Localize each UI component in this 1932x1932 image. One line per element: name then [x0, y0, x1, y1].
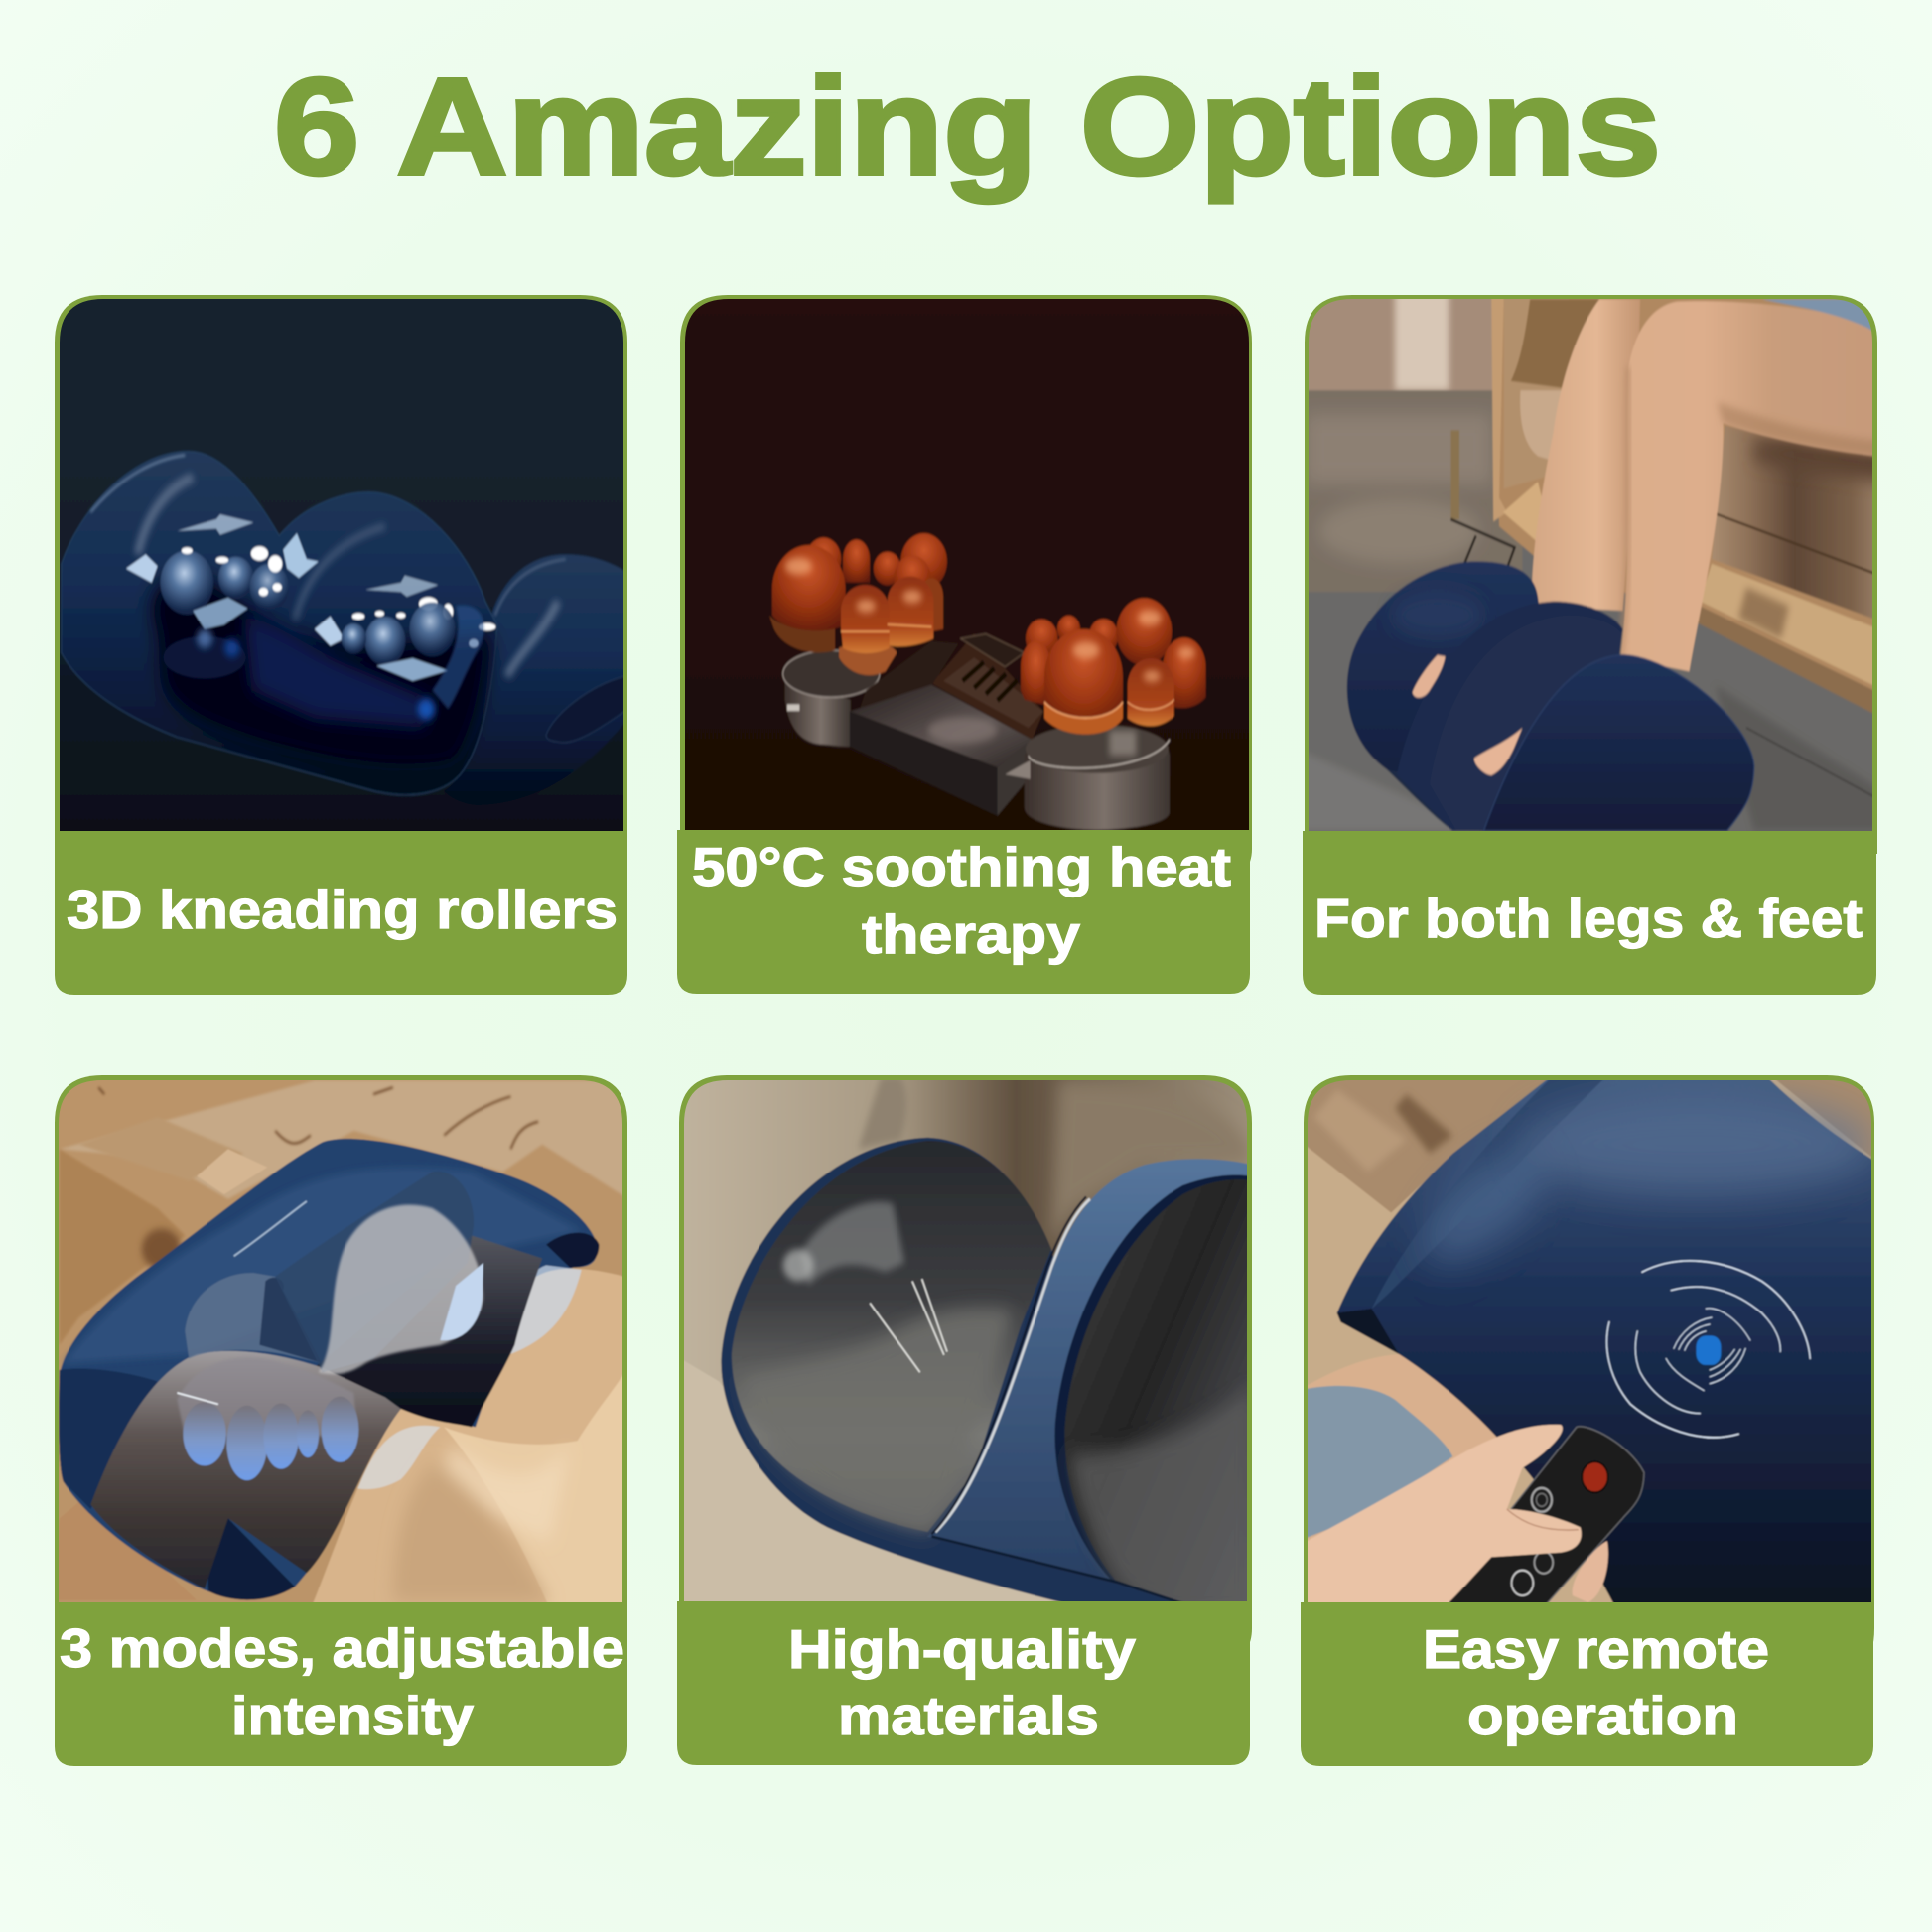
photo: remote control and massager	[1308, 1080, 1871, 1602]
photo: legs in massager on sofa	[1309, 299, 1872, 831]
caption text: 3D kneading rollers	[67, 879, 618, 940]
caption text: therapy	[862, 903, 1080, 965]
caption bar	[55, 1602, 627, 1766]
card frame	[55, 295, 627, 854]
caption bar	[55, 831, 627, 995]
card frame	[679, 1075, 1252, 1642]
massager	[1346, 560, 1539, 772]
caption text: intensity	[231, 1685, 474, 1746]
card frame	[55, 1075, 627, 1628]
panel: 50°C soothing heat therapy	[677, 295, 1252, 994]
title: 6 Amazing Options	[274, 51, 1661, 204]
photo: translucent massager on legs	[59, 1080, 622, 1602]
card frame	[1304, 1075, 1874, 1642]
caption bar	[1301, 1602, 1873, 1766]
copper right	[1026, 620, 1058, 658]
caption text: Easy remote	[1423, 1618, 1769, 1680]
caption bar	[677, 1601, 1250, 1765]
caption bar	[677, 830, 1250, 994]
caption text: 50°C soothing heat	[692, 836, 1231, 897]
caption text: For both legs & feet	[1314, 888, 1863, 949]
photo: massager close-up	[684, 1080, 1247, 1601]
panel: easy remote operation	[1301, 1075, 1874, 1766]
card frame	[1305, 295, 1877, 854]
photo: kneading rollers device	[60, 299, 623, 831]
copper back	[810, 536, 842, 567]
panel: for both legs and feet	[1303, 295, 1877, 995]
caption bar	[1303, 831, 1876, 995]
card frame	[680, 295, 1252, 862]
caption text: operation	[1467, 1685, 1738, 1746]
caption text: 3 modes, adjustable	[60, 1617, 624, 1679]
caption text: High-quality	[788, 1618, 1136, 1680]
photo: heated copper rollers	[685, 299, 1249, 830]
panel: 3 modes, adjustable intensity	[55, 1075, 627, 1766]
panel: high-quality materials	[657, 1053, 1276, 1765]
caption text: materials	[838, 1685, 1099, 1746]
panel: 3D kneading rollers	[55, 295, 627, 995]
